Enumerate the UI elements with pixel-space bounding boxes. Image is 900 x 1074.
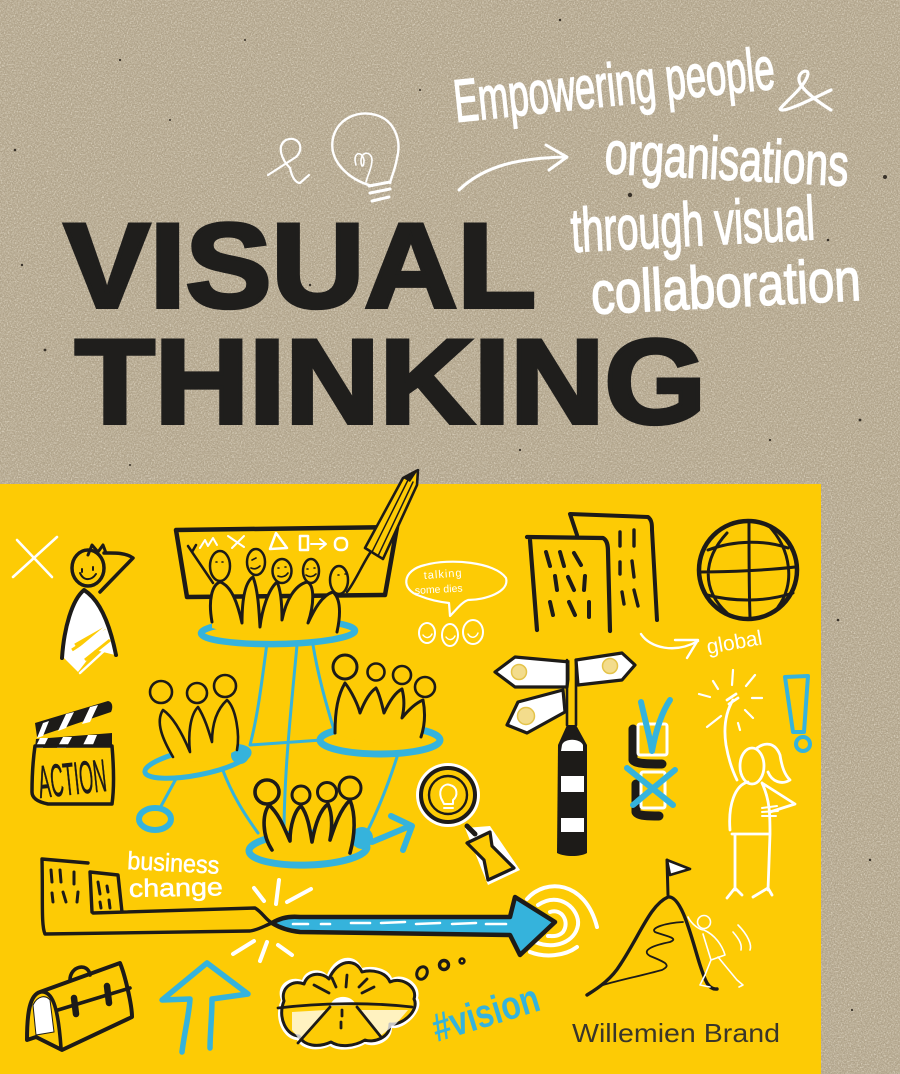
network lines: blue connectors [160,643,397,835]
group: bottom team [248,777,373,867]
strapline: handwritten [450,35,862,327]
icon: exclamation mark [785,676,810,751]
icon: tick and cross checkboxes [627,700,675,816]
label: business change: change [129,873,223,903]
icon: pencil [365,470,418,559]
label: global: global [705,627,764,659]
label: business change: business [127,847,220,880]
sparks at crossing [233,880,311,961]
ampersand doodle [780,71,831,110]
group: right team [320,655,440,754]
arrow: blue up [162,963,248,1052]
icon: vision cloud with sunrise [278,958,419,1050]
label: #vision: #vision [427,976,545,1051]
whiteboard frame [176,527,397,597]
speech bubble: talking [406,562,506,616]
icon: three faces [419,620,483,646]
speech bubble: talking: talking [423,567,463,582]
icon: woman with idea [699,670,795,898]
text: ACTION [36,749,109,808]
icon: light bulb [332,114,398,201]
arrow: blue from team [372,816,412,850]
speech bubble: talking: some dies [415,583,463,597]
title: VISUAL THINKING [64,199,706,449]
business change route arrow [42,859,555,955]
author name: Willemien Brand [572,1018,780,1048]
icon: globe [699,521,797,619]
title: VISUAL THINKING: VISUAL [64,199,536,333]
icon: signpost [495,653,635,856]
label: business change [127,847,223,903]
arrow: to the strapline [459,145,567,190]
group: left team [142,675,252,785]
icon: mountain with flag [587,860,717,995]
icon: white cross [13,537,57,577]
icon: person doodle [268,139,309,183]
icon: target circles [527,886,597,955]
icon: climber [688,916,750,987]
panel: yellow illustration area [0,484,821,1074]
blue ring [139,808,171,830]
arrow: to global [641,634,698,658]
icon: film clapperboard ACTION [32,701,114,808]
icon: magnifying glass with bulb [416,763,520,885]
icon: thinking person [62,545,133,673]
group: top team [188,545,370,645]
icon: briefcase [27,963,132,1050]
title: VISUAL THINKING: THINKING [75,315,706,449]
icon: office buildings [527,514,657,631]
thought dots [415,959,464,981]
